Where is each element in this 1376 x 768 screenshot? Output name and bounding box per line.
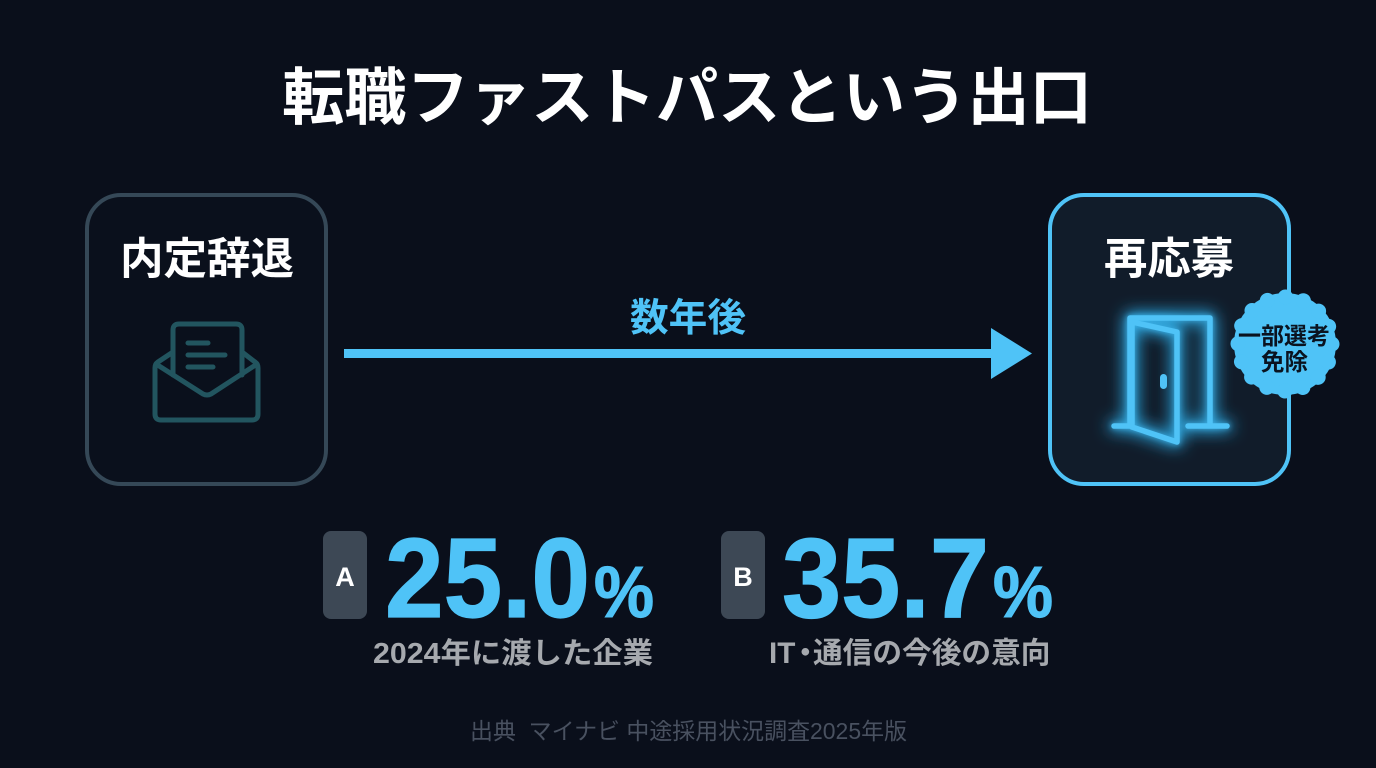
badge: 一部選考免除: 免除 — [1261, 349, 1308, 375]
badge: 一部選考免除 — [1234, 293, 1336, 395]
letter tag A: A — [335, 562, 355, 592]
panel heading: 内定辞退 — [120, 236, 294, 284]
stat B caption: IT — [769, 637, 795, 670]
letter tag A — [323, 531, 367, 619]
title: 転職ファストパスという出口 — [282, 64, 1092, 133]
stat B caption: ・ — [790, 637, 820, 670]
value 35.7%: % — [993, 553, 1053, 633]
stat A — [323, 515, 654, 670]
value 35.7%: 35.7 — [782, 515, 989, 641]
arrow shaft and head — [344, 328, 1032, 379]
arrow label: 数年後 — [630, 297, 746, 340]
letter tag B: B — [733, 562, 753, 592]
stat B caption: 通信の今後の意向 — [813, 637, 1050, 670]
panel heading: 再応募 — [1104, 236, 1234, 284]
panel frame — [87, 195, 326, 484]
icon: open envelope with letter — [155, 324, 258, 420]
panel: 内定辞退 — [87, 195, 326, 484]
source note: 出典 マイナビ 中途採用状況調査2025年版 — [470, 718, 907, 744]
value 25.0%: 25.0 — [385, 515, 590, 641]
icon: open door with glow — [1114, 318, 1227, 442]
value 25.0%: % — [594, 553, 654, 633]
panel frame — [1050, 195, 1289, 484]
badge: 一部選考免除: 一部選考 — [1238, 323, 1330, 349]
stat A caption: 2024年に渡した企業 — [373, 637, 653, 670]
panel: 再応募 — [1050, 195, 1336, 484]
stat B — [721, 515, 1053, 670]
arrow: 数年後 — [344, 297, 1032, 379]
letter tag B — [721, 531, 765, 619]
